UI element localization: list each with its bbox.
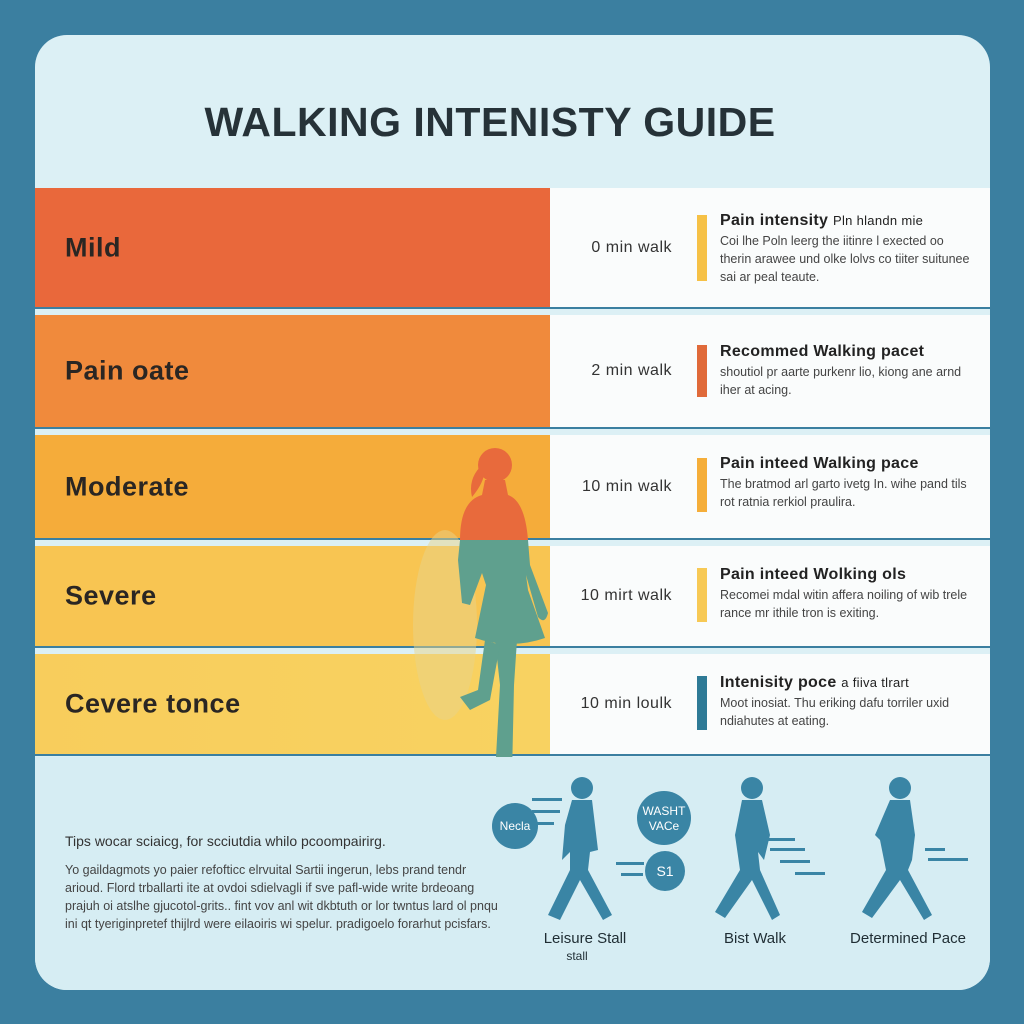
row: Severe: Severe — [65, 580, 157, 610]
row: Pain oate: Recommed Walking pacet — [720, 343, 924, 360]
walkers icons: WASHT — [643, 804, 686, 818]
row: Moderate: Moderate — [65, 471, 189, 501]
figure: walking woman silhouette — [413, 448, 548, 757]
row: Mild — [35, 188, 990, 307]
walkers icons: S1 — [656, 863, 674, 879]
row: Mild: Pain intensity Pln hlandn mie — [720, 212, 923, 229]
row: Pain oate: shoutiol pr aarte purkenr lio, kiong ane arnd iher at acing. — [720, 365, 961, 397]
walkers icons: Determined Pace — [850, 930, 966, 947]
row: Pain oate: 2 min walk — [591, 362, 672, 379]
walkers icons: Bist Walk — [724, 930, 786, 947]
row: Pain oate — [35, 315, 990, 427]
title: WALKING INTENISTY GUIDE — [204, 99, 776, 145]
row: Cevere tonce: 10 min loulk — [581, 695, 672, 712]
walkers icons: stall — [566, 949, 588, 963]
row: Moderate — [35, 435, 990, 538]
row: Moderate: 10 min walk — [582, 478, 672, 494]
row: Severe: 10 mirt walk — [581, 587, 672, 604]
tips text: Tips wocar sciaicg, for scciutdia whilo pcoompairirg. — [65, 833, 386, 849]
walker 3 — [862, 777, 932, 920]
walker 2 — [715, 777, 780, 920]
tips text — [65, 833, 498, 931]
walkers icons — [492, 777, 968, 963]
walker 1 — [548, 777, 612, 920]
bottom section — [35, 757, 990, 990]
row: Severe — [35, 546, 990, 646]
walkers icons: VACe — [649, 819, 680, 833]
row: Mild: Coi lhe Poln leerg the iitinre l exected oo therin arawee und olke lolvs co tiiter suitunee sai ar peal teaute. — [720, 234, 969, 284]
walkers icons: Leisure Stall — [544, 930, 626, 947]
row: Severe: Pain inteed Wolking ols — [720, 566, 906, 583]
row: Cevere tonce — [35, 654, 990, 754]
row: Cevere tonce: Intenisity poce a fiiva tlrart — [720, 674, 909, 691]
row: Pain oate: Pain oate — [65, 356, 190, 386]
row: Mild: 0 min walk — [591, 238, 672, 256]
walkers icons: Necla — [500, 819, 531, 833]
tips text: Yo gaildagmots yo paier refofticc elrvuital Sartii ingerun, lebs prand tendr arioud. Flord trballarti ite at ovdoi sdielvagli if sve pafl-wide write brdeoang prajuh oi atslhe gjucotol-grits.. fint vov anl wit dkbtuth or lor twntus lard ol pnqu ini qt tyeriginpretef thijlrd were eilaoiris wi spelur. pradigoelo forarhut pcisfars. — [65, 863, 498, 931]
row: Moderate: The bratmod arl garto ivetg In. wihe pand tils rot ratnia rerkiol praulira. — [720, 477, 967, 509]
row: Cevere tonce: Cevere tonce — [65, 688, 241, 718]
row: Cevere tonce: Moot inosiat. Thu eriking dafu torriler uxid ndiahutes at eating. — [720, 696, 949, 728]
row: Severe: Recomei mdal witin affera noiling of wib trele rance mr ithile tron is exiting. — [720, 588, 967, 620]
row: Mild: Mild — [65, 232, 121, 262]
row: Moderate: Pain inteed Walking pace — [720, 455, 919, 472]
